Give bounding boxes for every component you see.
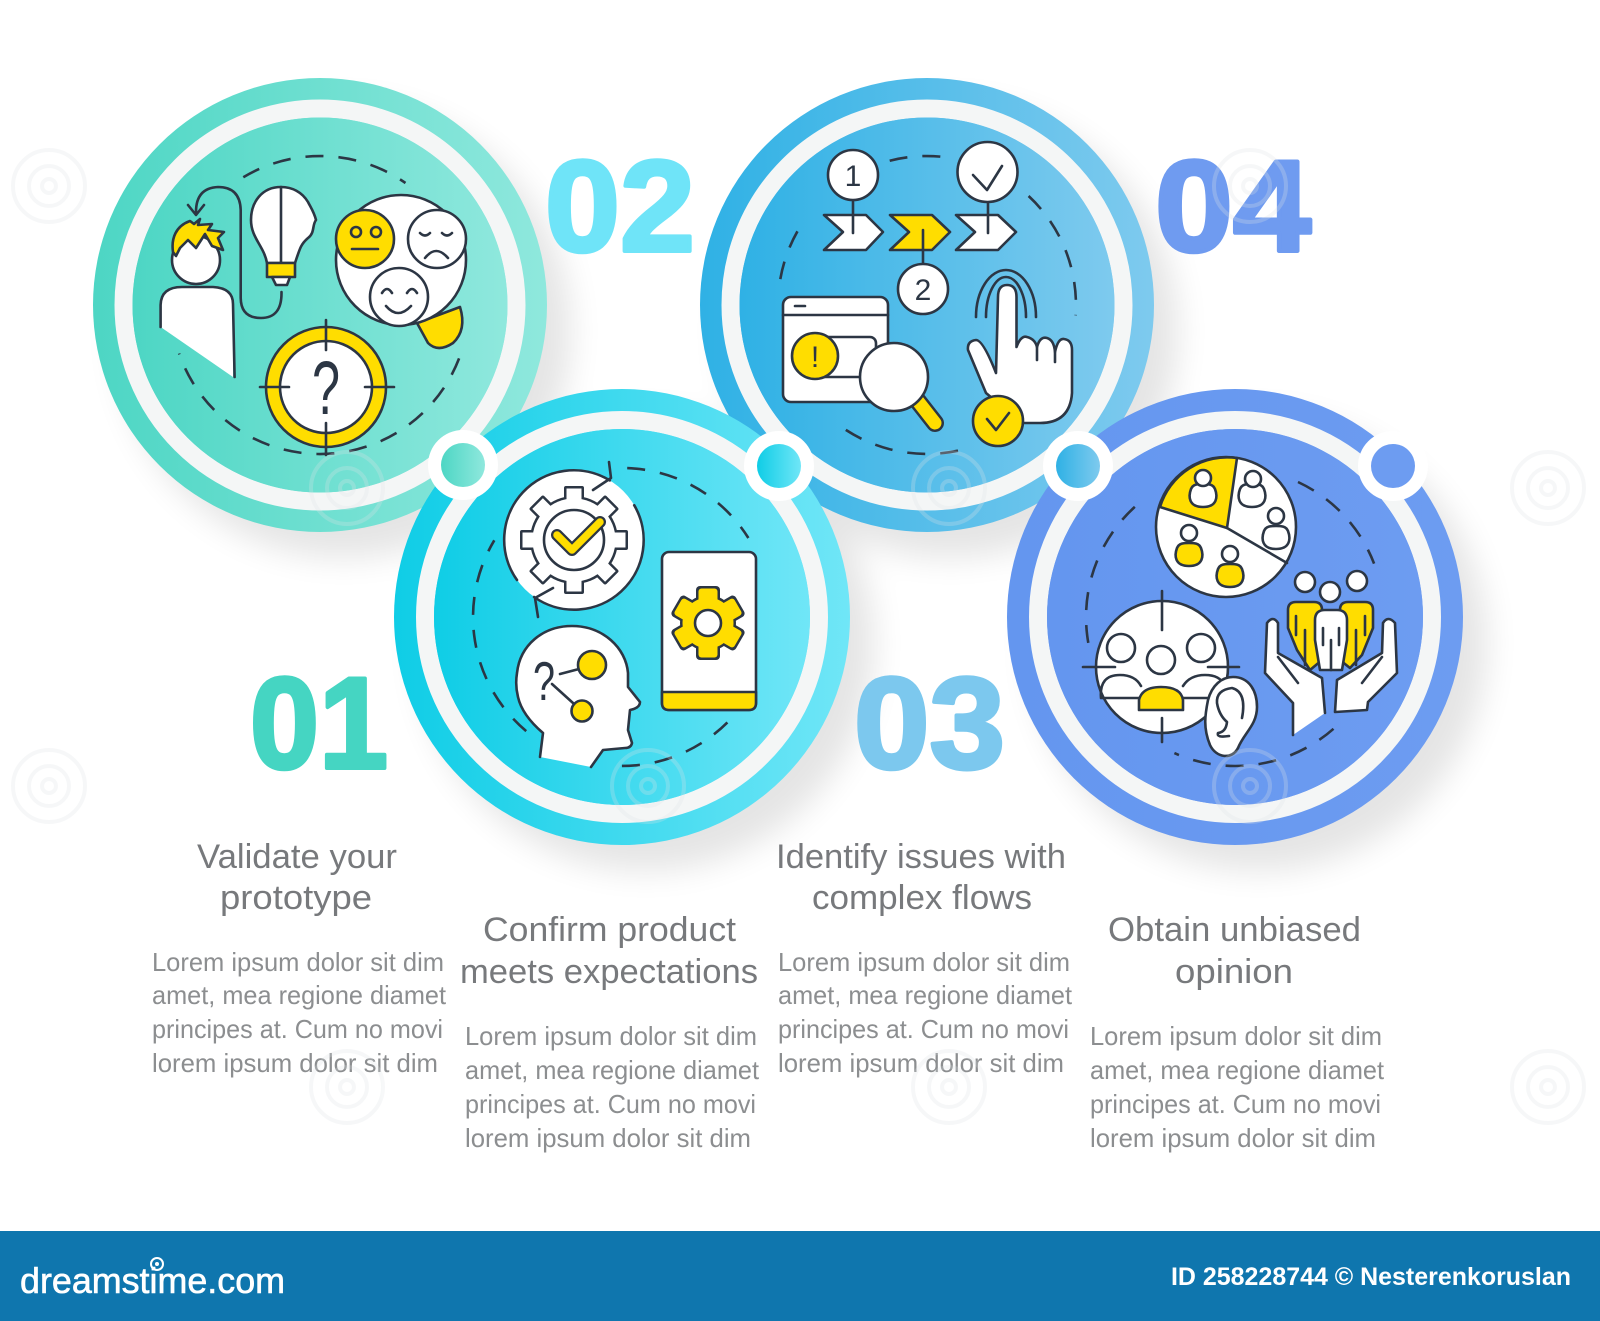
body text 1: amet, mea regione diamet [152, 980, 447, 1010]
icon: browser window with warning [783, 297, 935, 423]
connector dot 2 to 3 [744, 431, 814, 501]
icon: gear with check [504, 462, 644, 617]
body text 2 [465, 1021, 760, 1153]
body text 1: lorem ipsum dolor sit dim [152, 1048, 438, 1078]
panel: circle 1 validate prototype [93, 78, 547, 532]
body text 3: principes at. Cum no movi [778, 1014, 1069, 1044]
panel: circle 4 obtain opinion [1007, 389, 1463, 845]
text block 1 [152, 838, 447, 1078]
body text 1: principes at. Cum no movi [152, 1014, 443, 1044]
icon: flow steps: 2 [915, 274, 931, 307]
icon: browser window with warning: ! [811, 341, 819, 374]
heading: identify: Identify issues with [776, 838, 1066, 876]
text block 2 [460, 911, 760, 1153]
body text 1 [152, 947, 447, 1078]
body text 4: lorem ipsum dolor sit dim [1090, 1123, 1376, 1153]
heading: validate: prototype [220, 879, 372, 917]
heading: validate: Validate your [197, 838, 397, 876]
footer id and author: ID 258228744 © Nesterenkoruslan [1171, 1263, 1571, 1291]
connector dot 1 to 2 [428, 430, 498, 500]
icon: flow steps: 1 [845, 160, 861, 193]
heading: identify [776, 838, 1066, 917]
body text 3: amet, mea regione diamet [778, 980, 1073, 1010]
icon: person with idea bulb [161, 187, 316, 377]
drop shadows [117, 104, 1487, 871]
icon: phone with settings [662, 552, 756, 710]
heading: confirm [460, 911, 758, 991]
body text 3: lorem ipsum dolor sit dim [778, 1048, 1064, 1078]
panel: circle 2 confirm product [394, 389, 850, 845]
icon: audience pie chart [1156, 457, 1296, 597]
body text 2: amet, mea regione diamet [465, 1055, 760, 1085]
heading: obtain [1108, 911, 1361, 991]
body text 4: amet, mea regione diamet [1090, 1055, 1385, 1085]
footer bar [0, 1231, 1600, 1321]
icon: flow steps [824, 142, 1018, 314]
icon: tapping hand with check [968, 270, 1072, 446]
body text 2: Lorem ipsum dolor sit dim [465, 1021, 757, 1051]
icon: people in caring hands [1265, 571, 1397, 735]
heading: identify: complex flows [812, 879, 1032, 917]
number 01: 01 [250, 650, 388, 796]
icon: head with questions: ? [533, 650, 555, 712]
connector dot 3 to 4 [1043, 431, 1113, 501]
body text 2: lorem ipsum dolor sit dim [465, 1123, 751, 1153]
heading: obtain: Obtain unbiased [1108, 911, 1361, 949]
heading: confirm: Confirm product [483, 911, 737, 949]
heading: confirm: meets expectations [460, 953, 758, 991]
body text 4: principes at. Cum no movi [1090, 1089, 1381, 1119]
panel: circle 3 identify issues [700, 78, 1154, 532]
icon: magnifier with feedback faces [336, 195, 466, 348]
heading: obtain: opinion [1175, 953, 1293, 991]
body text 4 [1090, 1021, 1385, 1153]
number 02: 02 [545, 133, 695, 279]
body text 4: Lorem ipsum dolor sit dim [1090, 1021, 1382, 1051]
text block 3 [776, 838, 1073, 1078]
heading: validate [197, 838, 397, 917]
body text 1: Lorem ipsum dolor sit dim [152, 947, 444, 977]
connector dot 4 [1358, 431, 1428, 501]
icon: target with question: ? [312, 346, 340, 431]
body text 2: principes at. Cum no movi [465, 1089, 756, 1119]
text block 4 [1090, 911, 1385, 1153]
number 03: 03 [854, 650, 1005, 796]
body text 3 [778, 947, 1073, 1078]
number 04: 04 [1155, 133, 1311, 279]
icon: target with question [260, 320, 394, 455]
icon: head with questions [516, 626, 640, 767]
icon: target audience with ear [1083, 591, 1257, 756]
footer logo: dreamstime.com [20, 1260, 285, 1301]
body text 3: Lorem ipsum dolor sit dim [778, 947, 1070, 977]
